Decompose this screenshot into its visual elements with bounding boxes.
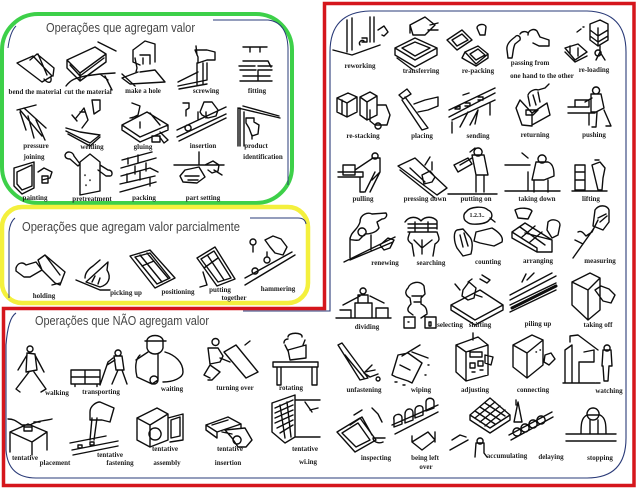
icon: stopping: stopping	[587, 454, 613, 462]
icon: being left over: being left	[411, 454, 440, 462]
icon: tentative placement	[8, 419, 71, 467]
icon: hammering	[245, 236, 296, 293]
icon: wiping	[392, 345, 432, 394]
icon: watching: watching	[595, 387, 623, 395]
icon: holding: holding	[33, 292, 56, 300]
icon: selecting: selecting	[437, 321, 463, 329]
icon: rotating	[273, 333, 318, 392]
icon: wiping: wiping	[411, 386, 432, 394]
icon: reworking	[333, 17, 388, 70]
icon: product identification: identification	[243, 153, 283, 161]
icon: arranging: arranging	[523, 257, 553, 265]
icon: pulling	[338, 153, 380, 203]
icon: packing: packing	[132, 194, 156, 202]
icon: delaying: delaying	[538, 453, 564, 461]
icon: lifting: lifting	[582, 195, 600, 203]
icon: pretreatment: pretreatment	[72, 195, 112, 203]
icon: shifting: shifting	[469, 321, 492, 329]
icon: picking up	[76, 260, 142, 297]
icon: renewing	[344, 213, 399, 267]
icon: pressure joining: pressure	[23, 142, 49, 150]
icon: taking off	[572, 273, 615, 329]
icon: putting together	[197, 247, 246, 302]
icon: tentative assembly: assembly	[153, 459, 181, 467]
icon: passing from one hand to the other: passing from	[511, 59, 549, 67]
icon: waiting: waiting	[161, 385, 184, 393]
icon: adjusting: adjusting	[461, 386, 490, 394]
icon: tentative fastening	[70, 402, 134, 467]
icon: lifting	[572, 160, 607, 203]
icon: passing from one hand to the other: one hand to the other	[510, 72, 574, 80]
icon: packing	[120, 152, 158, 202]
icon: tentative placement: placement	[40, 459, 71, 467]
icon: make a hole: make a hole	[125, 87, 161, 95]
icon: re-loading: re-loading	[579, 66, 610, 74]
panel: operations that add value	[2, 14, 292, 203]
icon: screwing: screwing	[193, 87, 220, 95]
icon: searching	[405, 217, 446, 267]
icon: positioning: positioning	[161, 288, 195, 296]
icon: piling up	[510, 273, 556, 328]
icon: counting	[454, 207, 502, 266]
panel: operations that partially add value	[2, 207, 308, 303]
icon: rotating: rotating	[279, 384, 303, 392]
icon: part setting: part setting	[186, 194, 221, 202]
icon: placing: placing	[411, 132, 433, 140]
icon: adjusting	[456, 333, 493, 394]
icon: measuring	[573, 206, 616, 265]
icon: tentative wiring	[272, 395, 320, 466]
icon: tentative insertion: insertion	[215, 459, 241, 467]
icon: pushing	[568, 87, 611, 139]
icon: inspecting	[337, 408, 392, 462]
icon: pulling: pulling	[352, 195, 374, 203]
icon: re-loading	[565, 20, 610, 74]
icon: tentative fastening: fastening	[106, 459, 134, 467]
icon: piling up: piling up	[525, 320, 551, 328]
icon: taking down	[505, 153, 560, 203]
icon: unfastening	[338, 343, 382, 394]
icon: returning	[516, 84, 550, 139]
icon: sending	[449, 88, 495, 140]
icon: stopping	[566, 408, 616, 462]
icon: pressure joining: joining	[22, 153, 45, 161]
icon: gluing	[122, 103, 168, 151]
icon: turning over: turning over	[216, 384, 254, 392]
icon: transferring: transferring	[403, 67, 440, 75]
icon: fitting	[239, 47, 272, 95]
icon: re-stacking: re-stacking	[346, 132, 380, 140]
heading: operations that partially add value: Operações que agregam valor parcialmente	[22, 219, 240, 234]
icon: tentative wiring: wi.ing	[299, 458, 318, 466]
icon: putting on: putting on	[461, 195, 492, 203]
icon: cut the material	[64, 42, 116, 96]
icon: transferring	[395, 17, 440, 75]
icon: tentative insertion	[206, 417, 252, 467]
icon: bend the material	[9, 54, 61, 96]
icon: selecting	[404, 282, 463, 329]
icon: holding	[16, 255, 65, 300]
icon: welding: welding	[80, 143, 104, 151]
icon: part setting	[174, 152, 224, 202]
icon: waiting	[136, 336, 184, 393]
icon: transporting: transporting	[82, 388, 120, 396]
heading: operations that add value: Operações que agregam valor	[46, 20, 196, 35]
icon: accumulating	[450, 398, 528, 460]
icon: insertion	[177, 102, 226, 150]
icon: putting on	[448, 148, 497, 203]
icon: walking: walking	[45, 389, 69, 397]
icon: accumulating: accumulating	[487, 452, 528, 460]
icon: tentative fastening: tentative	[97, 451, 123, 459]
icon: pressure joining	[17, 105, 49, 161]
icon: cut the material: cut the material	[64, 88, 112, 96]
icon: pressing down: pressing down	[404, 195, 447, 203]
icon: shifting	[451, 275, 503, 329]
icon: painting	[14, 162, 52, 202]
icon: bend the material: bend the material	[9, 88, 61, 96]
icon: welding	[66, 100, 104, 151]
heading: operations that do not add value: Operações que NÃO agregam valor	[35, 313, 210, 328]
icon: re-packing: re-packing	[462, 67, 495, 75]
icon: taking down: taking down	[518, 195, 556, 203]
icon: walking	[16, 346, 69, 397]
icon: measuring: measuring	[584, 257, 616, 265]
icon: watching	[563, 335, 623, 395]
icon: transporting	[71, 350, 127, 396]
icon: taking off: taking off	[584, 321, 613, 329]
icon: returning: returning	[521, 131, 550, 139]
icon: picking up: picking up	[110, 289, 142, 297]
icon: product identification: product	[244, 142, 268, 150]
icon: arranging	[512, 208, 560, 265]
icon: positioning	[130, 250, 195, 296]
icon: re-packing	[447, 24, 495, 75]
icon: delaying	[509, 400, 564, 461]
icon: tentative wiring: tentative	[292, 445, 318, 453]
icon: reworking: reworking	[345, 62, 376, 70]
icon: tentative placement: tentative	[12, 454, 38, 462]
icon: counting: 1.2.3..	[470, 213, 485, 219]
icon: tentative assembly: tentative	[152, 445, 178, 453]
icon: product identification	[238, 106, 283, 161]
icon: painting: painting	[23, 194, 48, 202]
icon: putting together: together	[222, 294, 246, 302]
icon: connecting	[513, 335, 555, 394]
icon: being left over: over	[419, 463, 433, 471]
icon: putting together: putting	[209, 286, 231, 294]
icon: connecting: connecting	[517, 386, 550, 394]
icon: tentative assembly	[137, 408, 183, 467]
icon: screwing	[178, 46, 220, 95]
icon: tentative insertion: tentative	[217, 445, 243, 453]
icon: being left over	[392, 398, 440, 471]
icon: counting: counting	[475, 258, 502, 266]
icon: searching: searching	[417, 259, 446, 267]
icon: insertion: insertion	[190, 142, 216, 150]
icon: hammering: hammering	[261, 285, 296, 293]
icon: gluing: gluing	[134, 143, 153, 151]
icon: dividing	[336, 288, 391, 331]
icon: placing	[399, 89, 438, 140]
icon: pushing: pushing	[582, 131, 606, 139]
icon: fitting: fitting	[248, 87, 267, 95]
icon: passing from one hand to the other	[507, 30, 574, 80]
icon: unfastening: unfastening	[346, 386, 382, 394]
icon: pretreatment	[65, 152, 112, 203]
icon: make a hole	[122, 41, 165, 95]
icon: pressing down	[398, 157, 447, 203]
icon: re-stacking	[337, 92, 390, 140]
icon: renewing: renewing	[371, 259, 399, 267]
icon: sending: sending	[467, 132, 490, 140]
icon: inspecting: inspecting	[361, 454, 392, 462]
icon: turning over	[204, 338, 258, 392]
icon: dividing: dividing	[355, 323, 380, 331]
